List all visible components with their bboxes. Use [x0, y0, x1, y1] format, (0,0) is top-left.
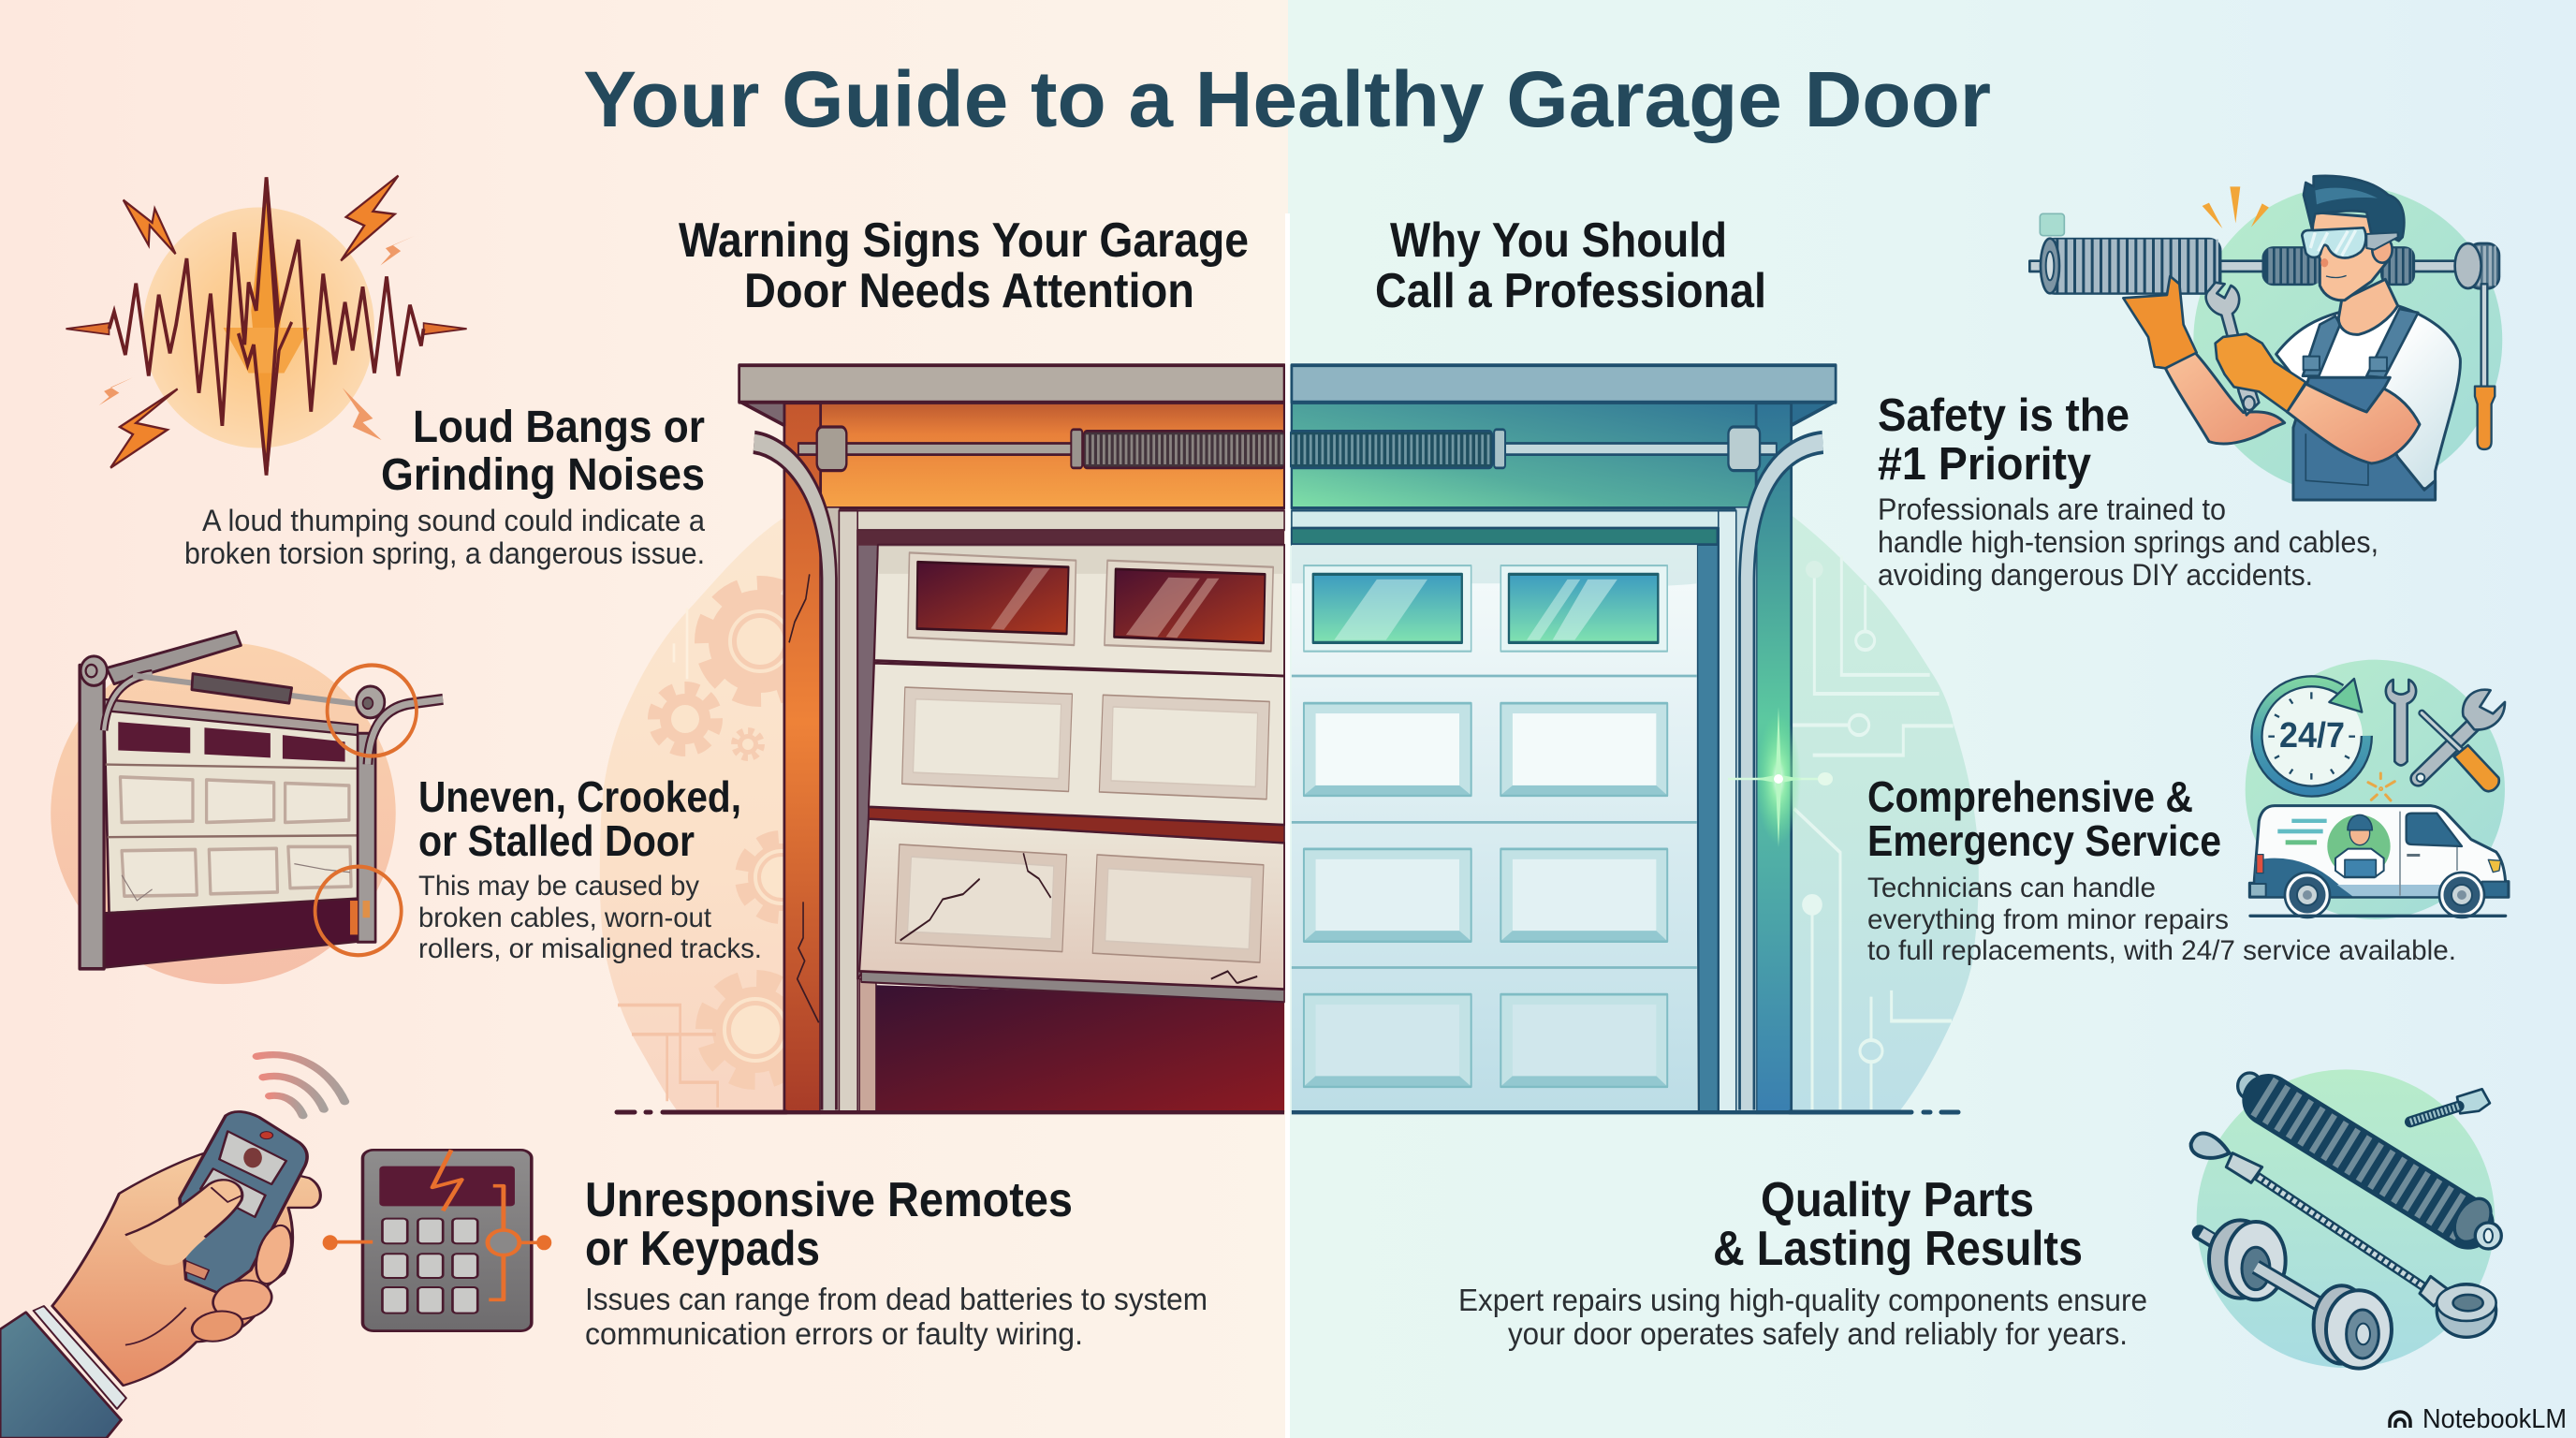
goggles	[2366, 232, 2398, 250]
torsion rod and spring: healthy	[1290, 427, 1777, 471]
garage door: worn half	[739, 365, 1285, 1112]
text: comprehensive: Technicians can handle	[1867, 873, 2156, 903]
roller axle	[2200, 1233, 2356, 1327]
text: safety: #1 Priority	[1878, 439, 2091, 490]
panels: clear rows	[1304, 703, 1667, 1087]
text: uneven door: Uneven, Crooked,	[418, 772, 741, 821]
text: quality parts: & Lasting Results	[1713, 1222, 2083, 1276]
text: loud bangs: Grinding Noises	[381, 450, 705, 500]
icon: noise waveform	[66, 176, 467, 476]
text: comprehensive	[1867, 772, 2456, 966]
panels: cracked section	[896, 844, 1264, 962]
far arm	[2287, 384, 2420, 463]
tools	[2386, 680, 2416, 765]
text: safety: avoiding dangerous DIY accidents.	[1878, 558, 2313, 592]
shirt	[2276, 306, 2460, 490]
lightning bolts	[110, 176, 398, 468]
backdrop: circuit traces behind healthy door	[1790, 514, 1979, 1110]
icon: 24/7 service van: 24/7	[2279, 716, 2345, 756]
icon: 24/7 service van	[2246, 660, 2509, 919]
text: safety: handle high-tension springs and cables,	[1878, 525, 2378, 559]
rear spring coils	[2262, 246, 2321, 286]
cracks	[789, 574, 1257, 1022]
lintel	[739, 365, 1284, 425]
background: professional side	[1288, 0, 2576, 1438]
hair	[2304, 176, 2404, 241]
sleeve	[0, 1313, 121, 1438]
heading: why call a professional: Why You Should	[1390, 213, 1727, 268]
icon: hand with remote	[0, 1055, 551, 1438]
text: comprehensive: Comprehensive &	[1867, 772, 2193, 821]
heading: warning signs	[679, 213, 1249, 318]
heading: warning signs: Warning Signs Your Garage	[679, 213, 1249, 268]
ground line: right	[1790, 1110, 1958, 1114]
heading: warning signs: Door Needs Attention	[744, 264, 1194, 318]
icon: quality parts	[2191, 1069, 2501, 1369]
van portrait	[2327, 814, 2391, 878]
icon: green sparkle on healthy door	[1728, 707, 1833, 847]
title: Your Guide to a Healthy Garage Door	[583, 55, 1991, 143]
text: quality parts	[1458, 1173, 2147, 1351]
text: unresponsive remotes	[585, 1173, 1208, 1351]
panels: middle section	[902, 687, 1269, 800]
rod	[2029, 261, 2469, 271]
clock	[2261, 686, 2363, 787]
neck	[2338, 279, 2398, 334]
garage door: healthy half	[1290, 365, 1836, 1112]
bolt	[2457, 1089, 2490, 1113]
cable	[2253, 1173, 2424, 1287]
torsion rod and spring	[798, 427, 1285, 471]
van lights	[2257, 855, 2263, 873]
text: uneven door: broken cables, worn-out	[418, 902, 712, 933]
text: quality parts: your door operates safely and reliably for years.	[1508, 1316, 2128, 1351]
lintel: healthy	[1292, 365, 1836, 425]
wheels	[2285, 873, 2330, 917]
text: uneven door: rollers, or misaligned tracks.	[418, 933, 762, 964]
text: loud bangs: broken torsion spring, a dangerous issue.	[184, 536, 705, 570]
text: safety	[1878, 390, 2378, 592]
ground line: left	[617, 1110, 786, 1114]
background: warning side	[0, 0, 1288, 1438]
head	[2312, 213, 2390, 301]
text: safety: Safety is the	[1878, 390, 2130, 441]
text: comprehensive: Emergency Service	[1867, 816, 2221, 865]
text: loud bangs: A loud thumping sound could indicate a	[202, 504, 705, 537]
near arm	[2165, 353, 2285, 444]
heading: why call a professional	[1375, 213, 1766, 318]
main spring	[2042, 238, 2221, 295]
pulley and cable	[2468, 243, 2499, 288]
spring	[2238, 1073, 2261, 1099]
text: quality parts: Quality Parts	[1761, 1173, 2034, 1227]
gloves	[2123, 276, 2197, 368]
centre divider	[1285, 213, 1290, 1438]
text: loud bangs: Loud Bangs or	[413, 403, 705, 452]
thumb and fingers	[125, 1180, 242, 1265]
spark	[2368, 773, 2394, 800]
remote	[180, 1111, 307, 1294]
text: unresponsive remotes: Issues can range from dead batteries to system	[585, 1282, 1208, 1316]
overalls	[2293, 377, 2436, 500]
van	[2249, 806, 2509, 897]
text: uneven door: or Stalled Door	[418, 816, 695, 865]
keypad	[362, 1150, 532, 1331]
window: clear right	[1500, 565, 1667, 652]
icon: crooked garage door	[51, 632, 443, 984]
backdrop: gears behind worn door	[600, 513, 819, 1110]
text: comprehensive: everything from minor repairs	[1867, 904, 2229, 935]
wiring fault	[330, 1150, 543, 1299]
text: loud bangs	[184, 403, 705, 570]
track: left curved rail	[754, 442, 829, 1109]
track: right curved rail	[1747, 442, 1822, 1109]
window: worn right	[1105, 561, 1273, 652]
text: safety: Professionals are trained to	[1878, 492, 2226, 526]
text: unresponsive remotes: or Keypads	[585, 1222, 820, 1276]
watermark: NotebookLM: NotebookLM	[2422, 1404, 2567, 1434]
rays	[2203, 186, 2269, 228]
signal arcs	[257, 1055, 344, 1116]
wrench	[2206, 283, 2259, 415]
text: uneven door	[418, 772, 762, 964]
text: unresponsive remotes: communication errors or faulty wiring.	[585, 1316, 1083, 1351]
text: comprehensive: to full replacements, with 24/7 service available.	[1867, 935, 2456, 966]
heading: why call a professional: Call a Professional	[1375, 264, 1766, 318]
icon: technician with spring	[2029, 176, 2502, 500]
text: quality parts: Expert repairs using high-quality components ensure	[1458, 1283, 2147, 1317]
window: clear left	[1304, 565, 1471, 652]
text: unresponsive remotes: Unresponsive Remotes	[585, 1173, 1073, 1227]
window: worn left	[908, 552, 1076, 645]
text: uneven door: This may be caused by	[418, 871, 699, 902]
small bracket	[2040, 213, 2064, 236]
